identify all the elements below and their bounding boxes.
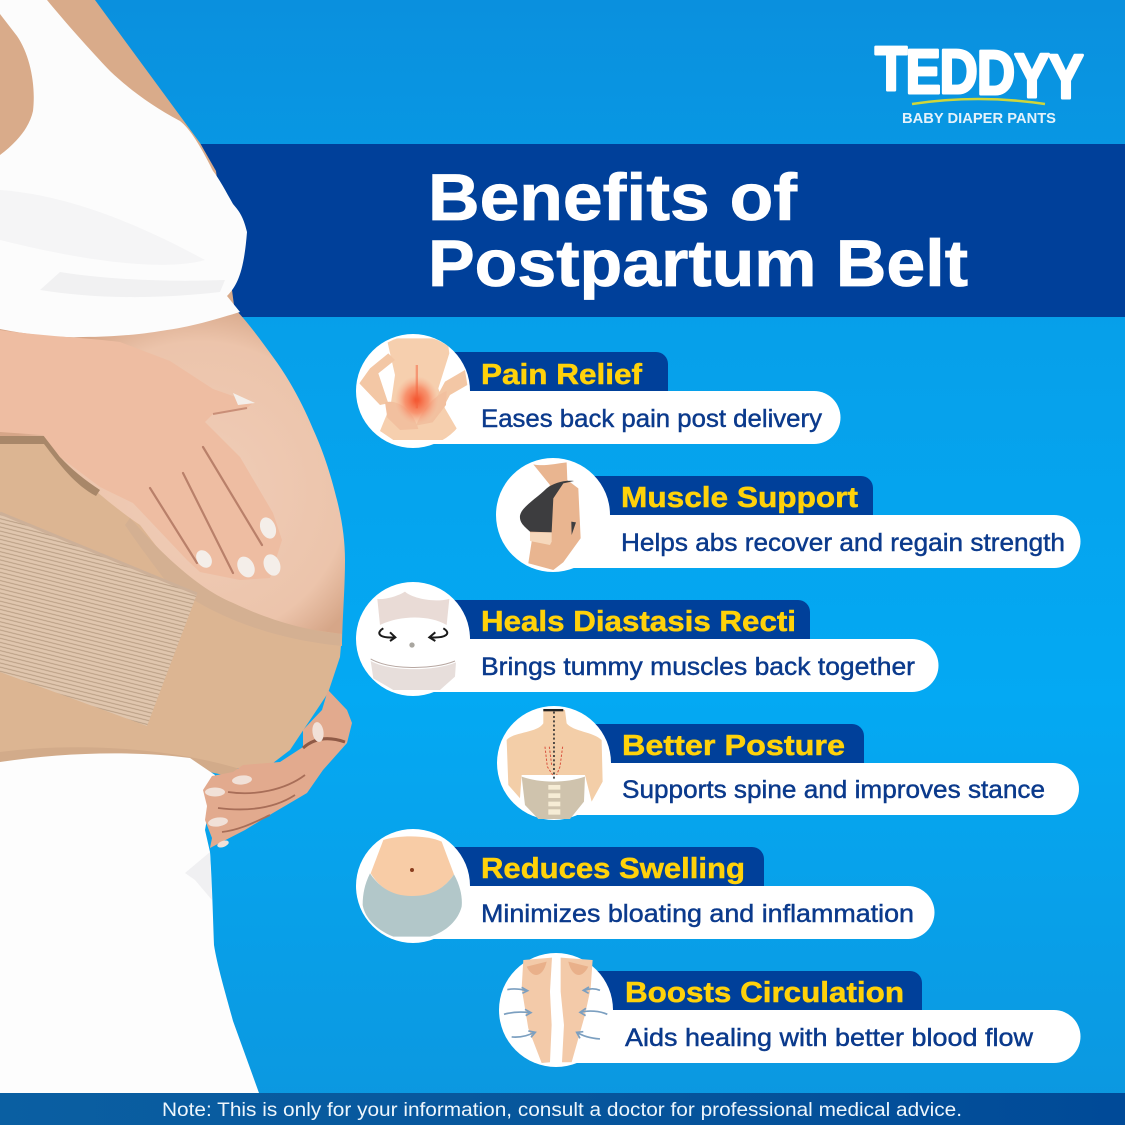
panel: pain relief: Eases back pain post delivery: [481, 405, 823, 433]
icon: spine and shoulders: [507, 709, 603, 819]
panel: muscle support: [496, 458, 1080, 572]
icon: abdomen: [363, 836, 462, 937]
panel: pain relief: Pain Relief: [481, 359, 642, 391]
white bra top: [0, 0, 247, 337]
icon: waist with arrows: [371, 592, 456, 690]
panel: boosts circulation: Aids healing with better blood flow: [625, 1024, 1034, 1052]
panel: pain relief: [356, 334, 840, 448]
panel: better posture: Supports spine and improves stance: [622, 776, 1045, 804]
belt: [0, 438, 342, 769]
white pants: [0, 753, 259, 1093]
photo: pregnant woman wearing postpartum belt: [0, 0, 352, 1093]
title band: [195, 144, 1125, 317]
icon: woman in sports bra: [520, 462, 581, 570]
panel: boosts circulation: Boosts Circulation: [625, 977, 904, 1009]
elastic panel: [0, 513, 197, 726]
icon: lower back pain: [359, 338, 467, 440]
panel: heals diastasis recti: Heals Diastasis Recti: [481, 606, 796, 638]
panel: reduces swelling: Reduces Swelling: [481, 853, 745, 885]
panel: better posture: [497, 706, 1079, 820]
lower hand: [203, 690, 352, 849]
icon: legs with arrows: [504, 958, 607, 1063]
hand on belly: [0, 330, 284, 580]
fingernails: [193, 393, 284, 580]
title: Postpartum Belt: [428, 226, 968, 300]
panel: boosts circulation: [499, 953, 1080, 1067]
title: [428, 160, 968, 300]
panel: heals diastasis recti: Brings tummy muscles back together: [481, 653, 915, 681]
panel: heals diastasis recti: [356, 582, 939, 696]
belly: [0, 310, 345, 700]
panel: reduces swelling: [356, 829, 935, 943]
footer note: Note: This is only for your information, consult a doctor for professional medical advice.: [162, 1100, 962, 1121]
panel: muscle support: Muscle Support: [621, 482, 858, 514]
panel: reduces swelling: Minimizes bloating and inflammation: [481, 900, 914, 928]
footer note: [0, 1093, 1125, 1125]
panel: muscle support: Helps abs recover and regain strength: [621, 529, 1065, 557]
logo: TEDDYY: TEDDYY: [875, 35, 1084, 112]
title: Benefits of: [428, 160, 798, 234]
panel: better posture: Better Posture: [622, 730, 845, 762]
logo: TEDDYY: BABY DIAPER PANTS: [902, 111, 1056, 127]
